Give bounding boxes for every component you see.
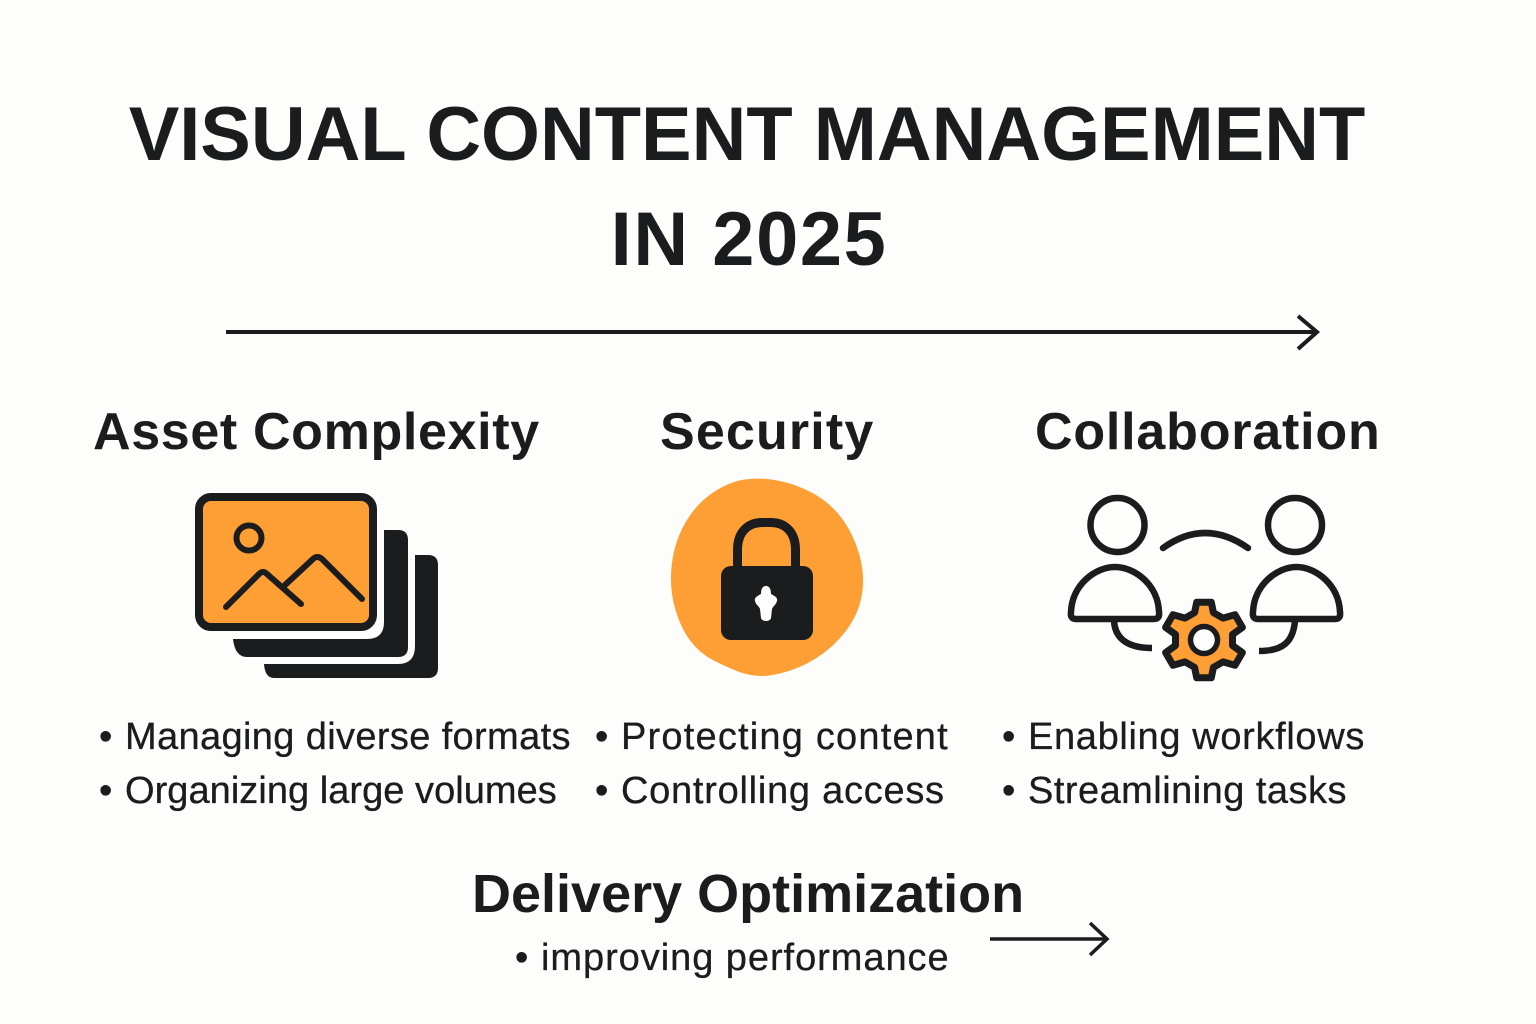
list: security bullets: • xyxy=(595,770,608,812)
list: asset complexity bullets xyxy=(99,716,571,812)
heading: Asset Complexity: Asset Complexity xyxy=(93,403,540,461)
list: asset complexity bullets: • xyxy=(99,770,112,812)
list: asset complexity bullets: Organizing large volumes xyxy=(125,770,557,812)
list: asset complexity bullets: • xyxy=(99,716,112,758)
list: security bullets: • xyxy=(595,716,608,758)
arrow: main timeline xyxy=(226,316,1317,349)
heading: Security: Security xyxy=(660,403,874,461)
list: security bullets xyxy=(595,716,949,812)
list: collaboration bullets: • xyxy=(1002,770,1015,812)
list: collaboration bullets: Streamlining tasks xyxy=(1028,770,1347,812)
text: improving performance: • xyxy=(515,937,528,979)
arrow: delivery xyxy=(990,923,1107,955)
heading: Delivery Optimization: Delivery Optimization xyxy=(472,864,1024,924)
list: security bullets: Protecting content xyxy=(621,716,949,758)
icon: security padlock xyxy=(671,479,863,676)
list: asset complexity bullets: Managing diverse formats xyxy=(125,716,571,758)
list: security bullets: Controlling access xyxy=(621,770,945,812)
title: VISUAL CONTENT MANAGEMENT xyxy=(129,92,1365,177)
icon: collaboration people and gear xyxy=(1071,498,1340,678)
heading: Collaboration: Collaboration xyxy=(1035,403,1381,461)
title xyxy=(129,92,1365,282)
list: collaboration bullets: Enabling workflows xyxy=(1028,716,1365,758)
list: collaboration bullets: • xyxy=(1002,716,1015,758)
list: collaboration bullets xyxy=(1002,716,1365,812)
icon: stacked images xyxy=(199,497,438,678)
title: IN 2025 xyxy=(611,197,887,282)
text: improving performance: improving performance xyxy=(541,937,950,979)
